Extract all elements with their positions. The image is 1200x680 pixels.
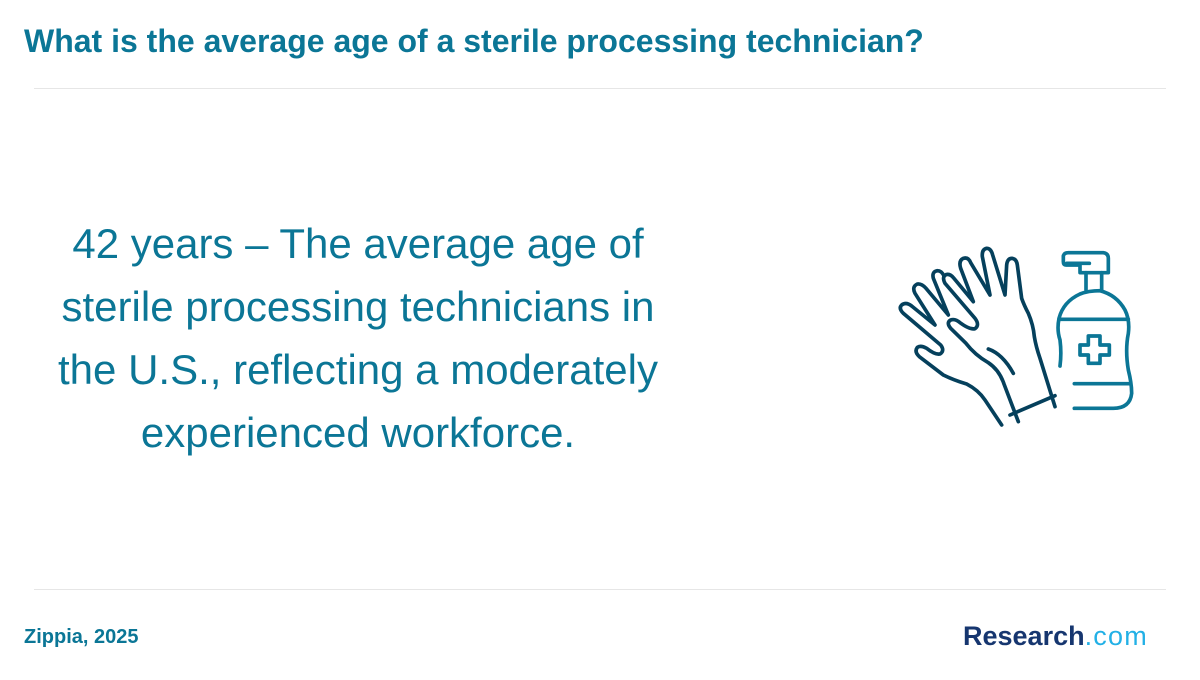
source: Zippia, 2025 — [24, 626, 138, 648]
main statement: experienced workforce. — [141, 409, 575, 456]
main statement — [58, 220, 658, 456]
main statement: 42 years – The average age of — [72, 220, 644, 267]
icon: bottle — [1058, 253, 1132, 408]
main statement: the U.S., reflecting a moderately — [58, 346, 658, 393]
icon: gloves and sanitizer bottle — [898, 246, 1134, 427]
main statement: sterile processing technicians in — [62, 283, 654, 330]
title: What is the average age of a sterile processing technician? — [24, 23, 924, 59]
icon: gloves — [900, 248, 1055, 425]
logo: Research.com: Research.com — [963, 621, 1148, 651]
